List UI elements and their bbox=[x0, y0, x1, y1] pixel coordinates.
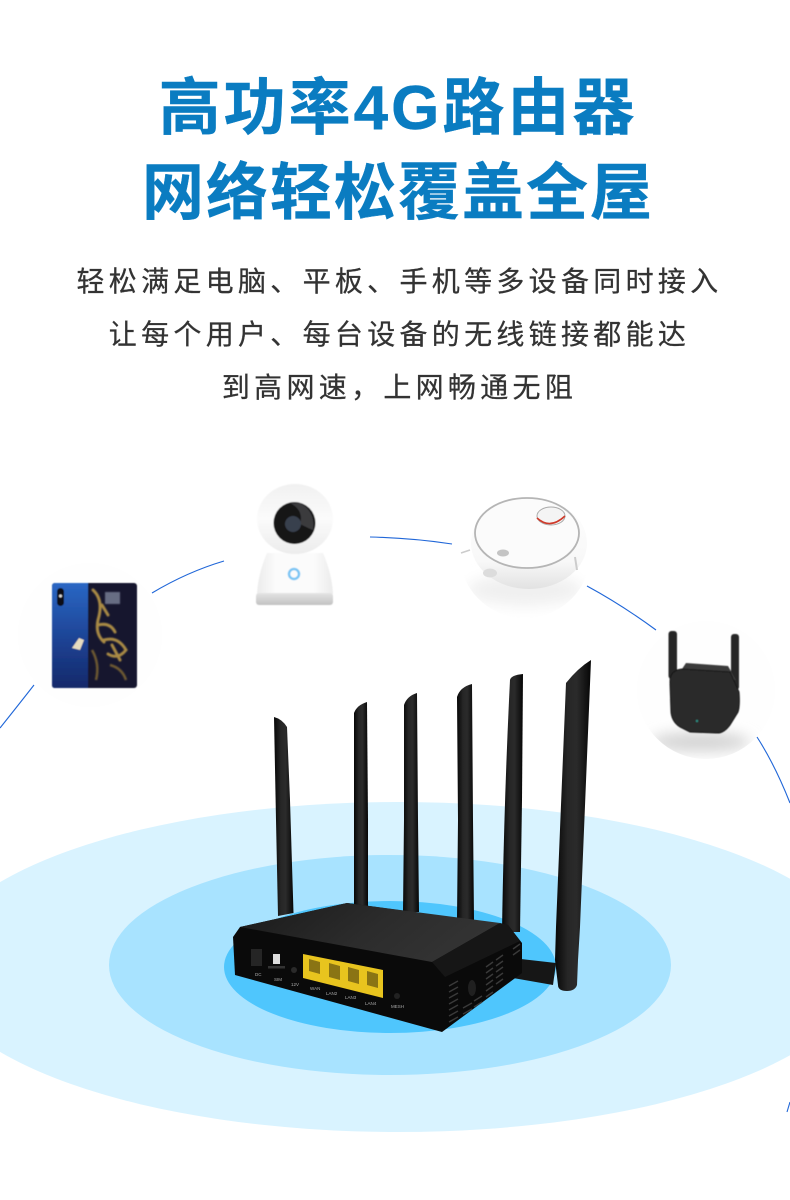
antennas bbox=[274, 660, 591, 991]
side vents bbox=[449, 944, 520, 1022]
port labels: DC bbox=[255, 972, 262, 977]
port labels: WAN bbox=[310, 986, 320, 991]
title line 1: 高功率4G路由器 bbox=[159, 74, 637, 143]
connection arcs bbox=[0, 537, 790, 1112]
dc and sim ports bbox=[251, 949, 400, 999]
port labels: LAN3 bbox=[345, 995, 357, 1000]
title line 2: 网络轻松覆盖全屋 bbox=[142, 159, 654, 228]
port labels bbox=[255, 972, 404, 1009]
device: robot vacuum bbox=[461, 497, 587, 606]
sma connector bbox=[505, 957, 556, 985]
illustration bbox=[0, 484, 790, 1132]
description line 3: 到高网速，上网畅通无阻 bbox=[222, 372, 577, 403]
router body bbox=[233, 903, 522, 1032]
signal rings bbox=[0, 802, 790, 1132]
side chamfer bbox=[432, 923, 520, 977]
device: security camera bbox=[256, 484, 333, 605]
device: wifi repeater bbox=[653, 630, 752, 758]
port labels: 12V bbox=[291, 982, 299, 987]
top face bbox=[240, 903, 500, 962]
port labels: SIM bbox=[274, 977, 282, 982]
port labels: LAN4 bbox=[365, 1001, 377, 1006]
description line 2: 让每个用户、每台设备的无线链接都能达 bbox=[109, 319, 690, 350]
port labels: MESH bbox=[391, 1004, 404, 1009]
device: smartphone bbox=[18, 563, 162, 707]
port labels: LAN2 bbox=[326, 991, 338, 996]
yellow ethernet ports bbox=[303, 954, 383, 998]
description line 1: 轻松满足电脑、平板、手机等多设备同时接入 bbox=[76, 266, 722, 297]
router bbox=[233, 660, 591, 1032]
